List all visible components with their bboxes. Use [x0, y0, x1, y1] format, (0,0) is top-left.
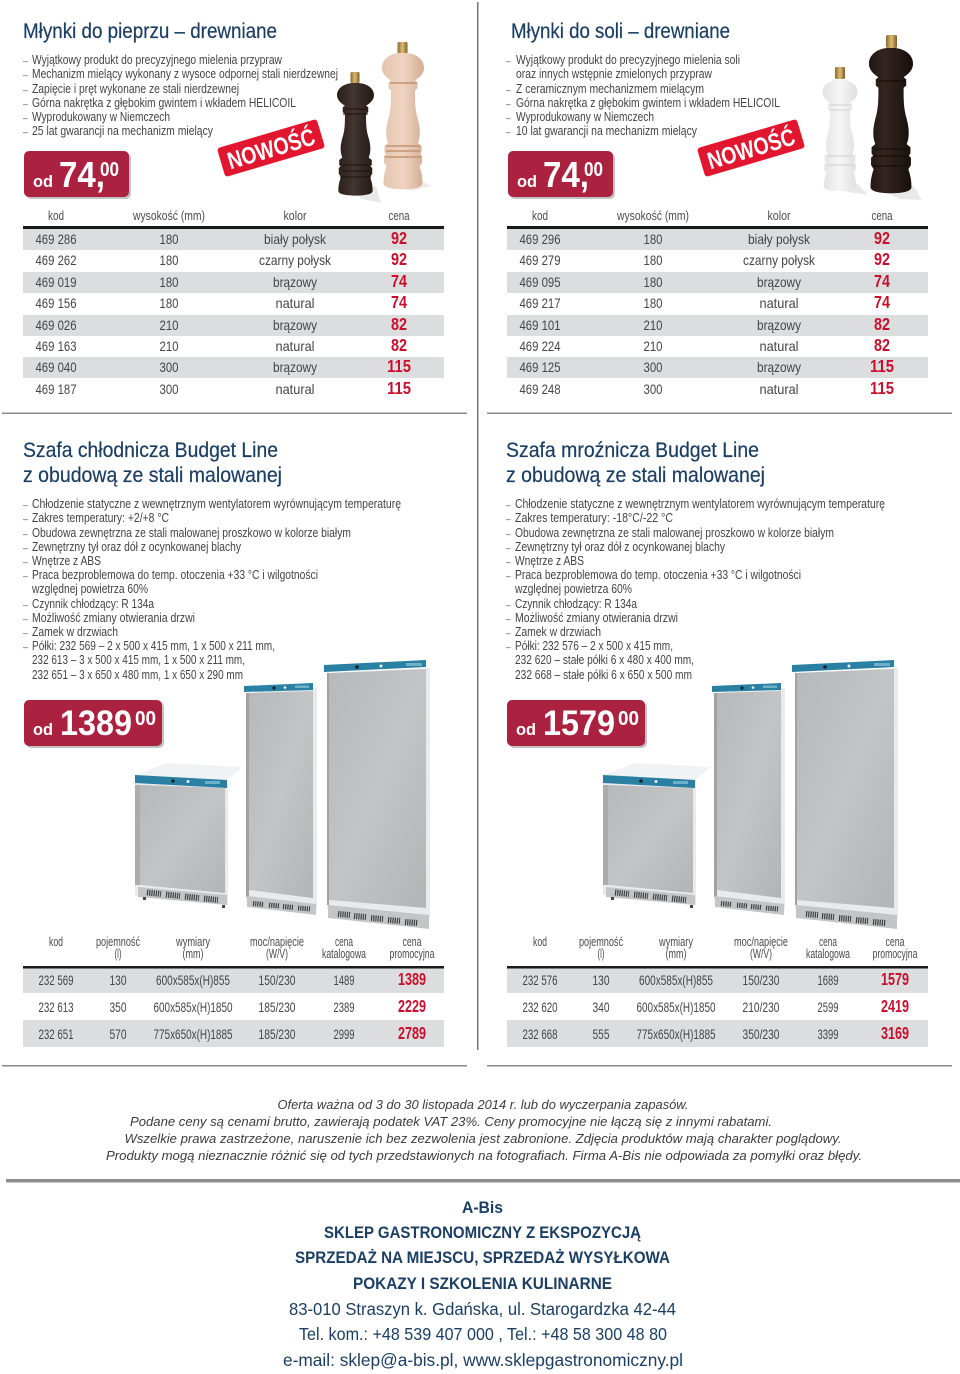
text block: freezer cabinet features: – — [506, 557, 511, 567]
text block: company contact: SPRZEDAŻ NA MIEJSCU, SPRZEDAŻ WYSYŁKOWA — [295, 1248, 670, 1267]
icon: pepper mills photo — [337, 42, 432, 203]
table: freezer cabinets: 555 — [592, 1026, 610, 1042]
text block: pepper mill features: 25 lat gwarancji na mechanizm mielący — [32, 124, 214, 138]
table: pepper mills: 469 156 — [36, 295, 77, 311]
table: refrigerated cabinets: 2999 — [334, 1026, 355, 1042]
table: salt mills: kod — [532, 209, 548, 223]
table: refrigerated cabinets: 185/230 — [258, 1026, 296, 1042]
badge: NOWOŚĆ: NOWOŚĆ — [224, 123, 318, 175]
text block: salt mill features: Z ceramicznym mechanizmem mielącym — [516, 82, 704, 96]
text block: refrigerated cabinet features: – — [23, 543, 28, 553]
table: salt mills: 115 — [870, 356, 894, 376]
table: refrigerated cabinets: (W/V) — [266, 947, 288, 961]
table: salt mills: brązowy — [757, 317, 801, 333]
table: pepper mills: wysokość (mm) — [132, 209, 205, 223]
table: pepper mills: 180 — [160, 252, 179, 268]
text block: freezer cabinet features: – — [506, 628, 511, 638]
table: pepper mills: 469 026 — [36, 317, 77, 333]
table: salt mills: 180 — [644, 231, 663, 247]
table: refrigerated cabinets: 232 613 — [38, 999, 74, 1015]
price tag: od 74,00 — [508, 151, 615, 199]
text block: freezer cabinet features: – — [506, 642, 511, 652]
price tag: od 74,00: 74, — [59, 154, 105, 195]
price tag: od 74,00 — [24, 151, 131, 199]
table: pepper mills: 469 040 — [36, 359, 77, 375]
table: freezer cabinets: 150/230 — [742, 972, 780, 988]
heading: refrigerated cabinet: z obudową ze stali malowanej — [23, 464, 282, 487]
table: refrigerated cabinets: 130 — [110, 972, 127, 988]
text block: pepper mill features: Zapięcie i pręt wykonane ze stali nierdzewnej — [32, 82, 239, 96]
table: salt mills: 180 — [644, 295, 663, 311]
icon: salt mills photo — [823, 35, 922, 200]
text block: company contact — [283, 1198, 683, 1370]
text block: refrigerated cabinet features: Zewnętrzny tył oraz dół z ocynkowanej blachy — [32, 540, 242, 554]
table: pepper mills: natural — [276, 338, 314, 354]
price tag: od 1579,00: 1579 — [543, 704, 615, 743]
text block: salt mill features: – — [506, 56, 511, 66]
price tag: od 74,00: 74, — [543, 154, 589, 195]
table: salt mills: kolor — [768, 209, 790, 223]
text block: freezer cabinet features: Zamek w drzwiach — [515, 625, 601, 639]
table: refrigerated cabinets: moc/napięcie — [250, 935, 304, 949]
table: refrigerated cabinets: 1489 — [334, 972, 355, 988]
table: freezer cabinets: 3169 — [881, 1023, 909, 1043]
table: freezer cabinets: 600x585x(H)1850 — [636, 999, 716, 1015]
table: pepper mills: cena — [388, 209, 410, 223]
text block: freezer cabinet features: Praca bezproblemowa do temp. otoczenia +33 °C i wilgotności — [515, 568, 801, 582]
table: salt mills: 469 296 — [520, 231, 561, 247]
price tag: od 1389,00: od — [33, 720, 53, 739]
text block: refrigerated cabinet features: – — [23, 514, 28, 524]
table: freezer cabinets: 350/230 — [742, 1026, 780, 1042]
text block: freezer cabinet features: Zakres temperatury: -18°C/-22 °C — [515, 511, 673, 525]
price tag: od 74,00: 00 — [584, 159, 603, 181]
table: salt mills: 82 — [874, 314, 890, 334]
table: refrigerated cabinets: 232 651 — [38, 1026, 74, 1042]
text block: refrigerated cabinet features — [23, 497, 401, 682]
text block: refrigerated cabinet features: – — [23, 628, 28, 638]
table: salt mills: brązowy — [757, 359, 801, 375]
heading: freezer cabinet: Szafa mroźnicza Budget Line — [506, 439, 759, 462]
table: refrigerated cabinets: 570 — [110, 1026, 127, 1042]
price tag: od 1389,00: 1389 — [60, 704, 132, 743]
text block: salt mill features: Wyprodukowany w Niemczech — [516, 110, 654, 124]
table: salt mills: natural — [760, 338, 798, 354]
text block: pepper mill features: – — [23, 113, 28, 123]
table: freezer cabinets: 1579 — [881, 969, 909, 989]
text block: freezer cabinet features: – — [506, 529, 511, 539]
table: freezer cabinets: katalogowa — [806, 947, 850, 961]
table: pepper mills: 210 — [160, 338, 179, 354]
table: freezer cabinets: 3399 — [818, 1026, 839, 1042]
table: refrigerated cabinets: 2389 — [334, 999, 355, 1015]
heading: salt mills: Młynki do soli – drewniane — [511, 20, 730, 43]
text block: pepper mill features: – — [23, 99, 28, 109]
table: refrigerated cabinets: 150/230 — [258, 972, 296, 988]
table: freezer cabinets: 340 — [592, 999, 610, 1015]
table: pepper mills: 74 — [391, 292, 407, 312]
price tag: od 1389,00: 00 — [135, 708, 156, 730]
text block: offer terms: Produkty mogą nieznacznie różnić się od tych przedstawionych na fotografiach. Firma A-Bis nie odpowiada za pomyłki oraz błędy. — [106, 1148, 862, 1163]
text block: refrigerated cabinet features: – — [23, 614, 28, 624]
table: salt mills: 469 217 — [520, 295, 561, 311]
table: pepper mills: 82 — [391, 314, 407, 334]
text block: pepper mill features: – — [23, 56, 28, 66]
table: pepper mills: brązowy — [273, 274, 317, 290]
table: refrigerated cabinets: cena — [402, 935, 422, 949]
text block: refrigerated cabinet features: – — [23, 529, 28, 539]
table: pepper mills: 469 286 — [36, 231, 77, 247]
text block: refrigerated cabinet features: Możliwość zmiany otwierania drzwi — [32, 611, 195, 625]
table: salt mills: natural — [760, 381, 798, 397]
table: salt mills: 469 248 — [520, 381, 561, 397]
table: pepper mills: 300 — [160, 359, 179, 375]
table: freezer cabinets: 775x650x(H)1885 — [636, 1026, 716, 1042]
price tag: od 1579,00 — [507, 700, 647, 748]
table: pepper mills: 210 — [160, 317, 179, 333]
table: refrigerated cabinets: cena — [335, 935, 353, 949]
text block: company contact: 83-010 Straszyn k. Gdańska, ul. Starogardzka 42-44 — [289, 1299, 676, 1319]
text block: freezer cabinet features: Obudowa zewnętrzna ze stali malowanej proszkowo w kolorze białym — [515, 526, 834, 540]
icon: three cabinets — [603, 660, 898, 929]
text block: pepper mill features: – — [23, 127, 28, 137]
table: salt mills: 92 — [874, 228, 890, 248]
text block: salt mill features: – — [506, 85, 511, 95]
text block: pepper mill features: Górna nakrętka z głębokim gwintem i wkładem HELICOIL — [32, 96, 296, 110]
table: freezer cabinets: (W/V) — [750, 947, 772, 961]
table: refrigerated cabinets: 232 569 — [38, 972, 74, 988]
table: salt mills: wysokość (mm) — [616, 209, 689, 223]
table: freezer cabinets: 210/230 — [742, 999, 780, 1015]
price tag: od 74,00: od — [33, 172, 53, 191]
text block: refrigerated cabinet features: – — [23, 557, 28, 567]
table: pepper mills: brązowy — [273, 359, 317, 375]
table: pepper mills: 74 — [391, 271, 407, 291]
text block: freezer cabinet features — [506, 497, 885, 682]
text block: freezer cabinet features: Możliwość zmiany otwierania drzwi — [515, 611, 678, 625]
text block: salt mill features: Wyjątkowy produkt do precyzyjnego mielenia soli — [516, 53, 740, 67]
table: freezer cabinets: promocyjna — [872, 947, 918, 961]
text block: freezer cabinet features: Wnętrze z ABS — [515, 554, 584, 568]
text block: pepper mill features: Wyprodukowany w Niemczech — [32, 110, 170, 124]
panel: freezer cabinet — [506, 439, 928, 1047]
table: freezer cabinets: 2419 — [881, 996, 909, 1016]
text block: company contact: POKAZY I SZKOLENIA KULINARNE — [353, 1274, 612, 1293]
panel: salt mills — [506, 20, 928, 398]
table: freezer cabinets: wymiary — [658, 935, 694, 949]
table: pepper mills: 180 — [160, 274, 179, 290]
table: pepper mills — [23, 209, 444, 398]
table: freezer cabinets: moc/napięcie — [734, 935, 788, 949]
table: refrigerated cabinets: pojemność — [96, 935, 140, 949]
text block: refrigerated cabinet features: Chłodzenie statyczne z wewnętrznym wentylatorem wyrównującym temperaturę — [32, 497, 401, 511]
table: pepper mills: biały połysk — [264, 231, 327, 247]
table: refrigerated cabinets: (l) — [114, 947, 122, 961]
text block: freezer cabinet features: 232 620 – stałe półki 6 x 480 x 400 mm, — [515, 653, 694, 667]
table: salt mills: 469 125 — [520, 359, 561, 375]
table: pepper mills: natural — [276, 295, 314, 311]
badge: NOWOŚĆ: NOWOŚĆ — [704, 123, 798, 175]
table: salt mills: 469 101 — [520, 317, 561, 333]
table: pepper mills: 469 163 — [36, 338, 77, 354]
table: pepper mills: kod — [48, 209, 64, 223]
table: pepper mills: 92 — [391, 228, 407, 248]
table: salt mills: 210 — [644, 317, 663, 333]
table: salt mills: 300 — [644, 359, 663, 375]
table: refrigerated cabinets: promocyjna — [390, 947, 435, 961]
table: salt mills: natural — [760, 295, 798, 311]
text block: freezer cabinet features: – — [506, 514, 511, 524]
table: pepper mills: 180 — [160, 295, 179, 311]
text block: refrigerated cabinet features: 232 613 – 3 x 500 x 415 mm, 1 x 500 x 211 mm, — [32, 653, 245, 667]
table: freezer cabinets: 232 620 — [522, 999, 558, 1015]
text block: freezer cabinet features: – — [506, 600, 511, 610]
text block: salt mill features: – — [506, 99, 511, 109]
table: freezer cabinets: 130 — [592, 972, 610, 988]
heading: pepper mills: Młynki do pieprzu – drewniane — [23, 20, 277, 43]
text block: freezer cabinet features: Zewnętrzny tył oraz dół z ocynkowanej blachy — [515, 540, 726, 554]
table: pepper mills: 469 187 — [36, 381, 77, 397]
table: salt mills: 92 — [874, 249, 890, 269]
table: freezer cabinets: pojemność — [579, 935, 623, 949]
table: salt mills: biały połysk — [748, 231, 811, 247]
text block: refrigerated cabinet features: – — [23, 642, 28, 652]
text block: offer terms: Wszelkie prawa zastrzeżone, naruszenie ich bez zezwolenia jest zabronione. Zdjęcia produktów mają charakter poglądowy. — [124, 1131, 841, 1146]
table: refrigerated cabinets — [23, 935, 444, 1047]
text block: pepper mill features: Mechanizm mielący wykonany z wysoce odpornej stali nierdzewnej — [32, 67, 338, 81]
panel: refrigerated cabinet — [23, 439, 444, 1047]
table: salt mills: 180 — [644, 252, 663, 268]
table: salt mills — [507, 209, 928, 398]
table: freezer cabinets: (mm) — [666, 947, 686, 961]
text block: freezer cabinet features: – — [506, 614, 511, 624]
text block: company contact: A-Bis — [462, 1198, 503, 1217]
table: refrigerated cabinets: (mm) — [182, 947, 204, 961]
text block: refrigerated cabinet features: Wnętrze z ABS — [32, 554, 101, 568]
table: freezer cabinets: 1689 — [818, 972, 839, 988]
price tag: od 1389,00 — [24, 700, 164, 748]
table: refrigerated cabinets: 1389 — [398, 969, 426, 989]
text block: salt mill features: – — [506, 113, 511, 123]
text block: refrigerated cabinet features: Czynnik chłodzący: R 134a — [32, 597, 154, 611]
heading: refrigerated cabinet: Szafa chłodnicza Budget Line — [23, 439, 278, 462]
table: refrigerated cabinets: 600x585x(H)855 — [156, 972, 230, 988]
text block: freezer cabinet features: względnej powietrza 60% — [514, 582, 632, 596]
text block: freezer cabinet features: Czynnik chłodzący: R 134a — [515, 597, 637, 611]
text block: freezer cabinet features: 232 668 – stałe półki 6 x 650 x 500 mm — [515, 668, 692, 682]
panel: pepper mills — [23, 20, 444, 398]
table: pepper mills: 115 — [387, 378, 411, 398]
text block: refrigerated cabinet features: – — [23, 571, 28, 581]
text block: refrigerated cabinet features: Obudowa zewnętrzna ze stali malowanej proszkowo w kolorze białym — [32, 526, 351, 540]
text block: company contact: e-mail: sklep@a-bis.pl, www.sklepgastronomiczny.pl — [283, 1350, 683, 1370]
table: refrigerated cabinets: wymiary — [175, 935, 211, 949]
text block: salt mill features: 10 lat gwarancji na mechanizm mielący — [516, 124, 698, 138]
table: pepper mills: 82 — [391, 335, 407, 355]
text block: pepper mill features: Wyjątkowy produkt do precyzyjnego mielenia przypraw — [32, 53, 283, 67]
heading: freezer cabinet: z obudową ze stali malowanej — [506, 464, 765, 487]
text block: refrigerated cabinet features: – — [23, 600, 28, 610]
table: refrigerated cabinets: 2789 — [398, 1023, 426, 1043]
text block: refrigerated cabinet features: – — [23, 500, 28, 510]
text block: freezer cabinet features: Chłodzenie statyczne z wewnętrznym wentylatorem wyrównującym temperaturę — [515, 497, 885, 511]
price tag: od 1579,00: 00 — [618, 708, 639, 730]
text block: company contact: Tel. kom.: +48 539 407 000 , Tel.: +48 58 300 48 80 — [299, 1324, 667, 1344]
table: freezer cabinets: kod — [533, 935, 547, 949]
text block: offer terms: Podane ceny są cenami brutto, zawierają podatek VAT 23%. Ceny promocyjne nie łączą się z innymi rabatami. — [130, 1114, 772, 1129]
table: refrigerated cabinets: 2229 — [398, 996, 426, 1016]
table: salt mills: 180 — [644, 274, 663, 290]
heading: freezer cabinet — [506, 439, 765, 487]
price tag: od 1579,00: od — [516, 720, 536, 739]
text block: refrigerated cabinet features: względnej powietrza 60% — [31, 582, 148, 596]
table: refrigerated cabinets: 775x650x(H)1885 — [154, 1026, 233, 1042]
text block: salt mill features — [506, 53, 780, 138]
table: refrigerated cabinets: 600x585x(H)1850 — [154, 999, 233, 1015]
text block: pepper mill features: – — [23, 85, 28, 95]
table: pepper mills: 115 — [387, 356, 411, 376]
price tag: od 74,00: od — [517, 172, 537, 191]
text block: salt mill features: oraz innych wstępnie zmielonych przypraw — [516, 67, 713, 81]
table: freezer cabinets — [507, 935, 928, 1047]
text block: refrigerated cabinet features: Zamek w drzwiach — [32, 625, 118, 639]
table: salt mills: czarny połysk — [743, 252, 816, 268]
text block: salt mill features: – — [506, 127, 511, 137]
table: pepper mills: 180 — [160, 231, 179, 247]
table: pepper mills: 92 — [391, 249, 407, 269]
text block: freezer cabinet features: – — [506, 500, 511, 510]
table: freezer cabinets: (l) — [598, 947, 604, 961]
table: salt mills: 74 — [874, 271, 890, 291]
text block: freezer cabinet features: – — [506, 543, 511, 553]
text block: company contact: SKLEP GASTRONOMICZNY Z EKSPOZYCJĄ — [324, 1223, 641, 1242]
table: salt mills: 469 279 — [520, 252, 561, 268]
table: freezer cabinets: cena — [886, 935, 905, 949]
text block: freezer cabinet features: – — [506, 571, 511, 581]
price tag: od 74,00: 00 — [100, 159, 119, 181]
table: salt mills: cena — [872, 209, 893, 223]
table: pepper mills: 469 019 — [36, 274, 77, 290]
table: refrigerated cabinets: kod — [49, 935, 63, 949]
table: salt mills: 115 — [870, 378, 894, 398]
table: salt mills: 300 — [644, 381, 663, 397]
text block: offer terms — [106, 1097, 862, 1163]
table: freezer cabinets: 600x585x(H)855 — [639, 972, 713, 988]
table: salt mills: 82 — [874, 335, 890, 355]
table: refrigerated cabinets: 185/230 — [258, 999, 296, 1015]
table: pepper mills: kolor — [284, 209, 306, 223]
text block: refrigerated cabinet features: Zakres temperatury: +2/+8 °C — [32, 511, 169, 525]
table: pepper mills: natural — [276, 381, 314, 397]
table: pepper mills: 300 — [160, 381, 179, 397]
table: pepper mills: brązowy — [273, 317, 317, 333]
text block: refrigerated cabinet features: 232 651 – 3 x 650 x 480 mm, 1 x 650 x 290 mm — [32, 668, 243, 682]
table: refrigerated cabinets: katalogowa — [322, 947, 366, 961]
text block: salt mill features: Górna nakrętka z głębokim gwintem i wkładem HELICOIL — [516, 96, 780, 110]
table: freezer cabinets: 232 668 — [522, 1026, 558, 1042]
table: salt mills: 74 — [874, 292, 890, 312]
table: salt mills: 469 095 — [520, 274, 561, 290]
heading: refrigerated cabinet — [23, 439, 282, 487]
text block: pepper mill features — [23, 53, 338, 138]
text block: offer terms: Oferta ważna od 3 do 30 listopada 2014 r. lub do wyczerpania zapasów. — [278, 1097, 688, 1112]
table: pepper mills: czarny połysk — [259, 252, 332, 268]
table: refrigerated cabinets: 350 — [110, 999, 127, 1015]
table: freezer cabinets: 2599 — [818, 999, 839, 1015]
table: salt mills: brązowy — [757, 274, 801, 290]
table: pepper mills: 469 262 — [36, 252, 77, 268]
table: salt mills: 210 — [644, 338, 663, 354]
table: freezer cabinets: 232 576 — [522, 972, 558, 988]
table: salt mills: 469 224 — [520, 338, 561, 354]
text block: refrigerated cabinet features: Półki: 232 569 – 2 x 500 x 415 mm, 1 x 500 x 211 mm, — [32, 639, 275, 653]
table: freezer cabinets: cena — [819, 935, 837, 949]
text block: refrigerated cabinet features: Praca bezproblemowa do temp. otoczenia +33 °C i wilgotności — [32, 568, 318, 582]
text block: freezer cabinet features: Półki: 232 576 – 2 x 500 x 415 mm, — [515, 639, 673, 653]
icon: three cabinets — [135, 660, 430, 929]
text block: pepper mill features: – — [23, 70, 28, 80]
